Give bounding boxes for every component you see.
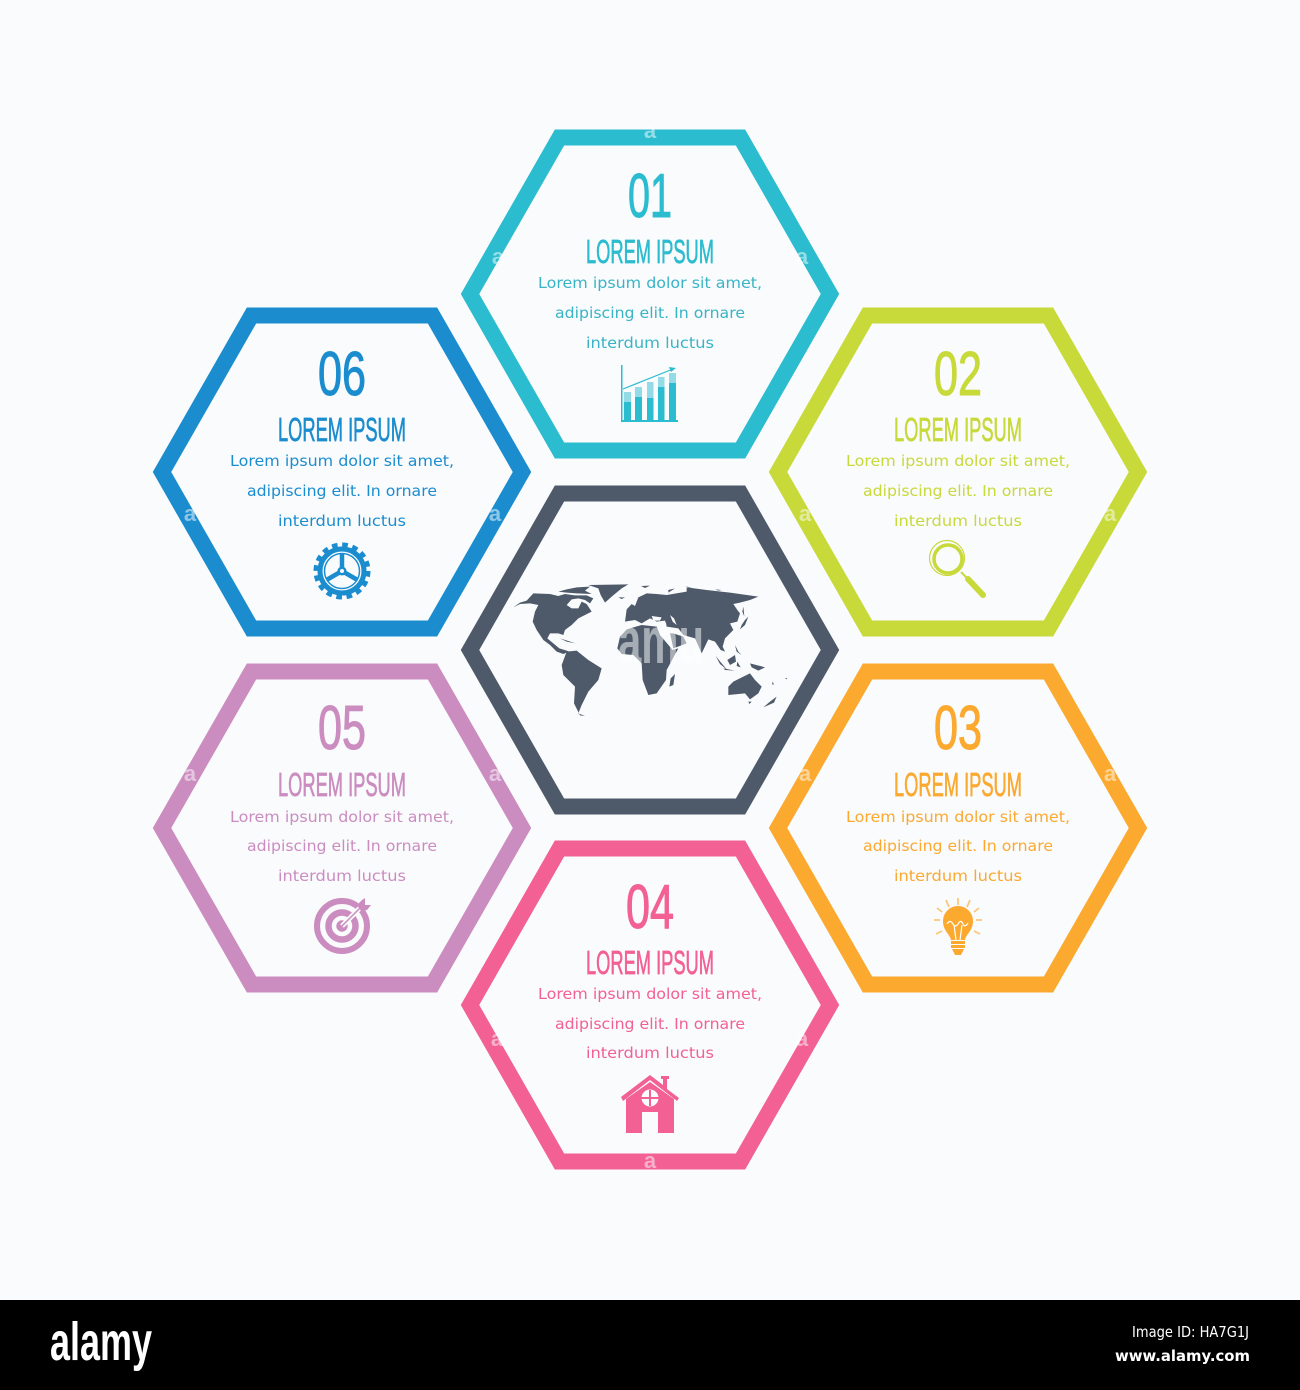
icon: light bulb bbox=[934, 898, 982, 955]
body text 04: interdum luctus bbox=[586, 1044, 714, 1062]
icon: gear bbox=[316, 545, 368, 597]
panel: 03 orange hexagon bbox=[778, 672, 1138, 984]
panel: 02 green hexagon bbox=[778, 316, 1138, 628]
world map bbox=[513, 584, 787, 716]
watermark marks: a bbox=[799, 501, 812, 526]
icon: magnifying glass bbox=[930, 540, 983, 595]
body text 02: adipiscing elit. In ornare bbox=[863, 482, 1053, 500]
heading 03: LOREM IPSUM bbox=[894, 766, 1022, 803]
body text 02 bbox=[846, 452, 1070, 530]
body text 01 bbox=[538, 274, 762, 352]
watermark marks: amu bbox=[618, 603, 704, 677]
panel: 04 pink hexagon bbox=[470, 848, 830, 1162]
footer logo: alamy bbox=[50, 1312, 152, 1372]
icon: bar chart bbox=[621, 365, 678, 422]
watermark marks: a bbox=[184, 501, 197, 526]
body text 03: Lorem ipsum dolor sit amet, bbox=[846, 808, 1070, 826]
number 05: 05 bbox=[318, 694, 366, 763]
watermark marks: a bbox=[491, 1026, 504, 1051]
number 01: 01 bbox=[628, 162, 672, 231]
body text 03 bbox=[846, 808, 1070, 885]
watermark marks: a bbox=[796, 244, 809, 269]
watermark marks: a bbox=[184, 761, 197, 786]
watermark marks: a bbox=[1104, 761, 1117, 786]
body text 03: adipiscing elit. In ornare bbox=[863, 837, 1053, 855]
heading 04: LOREM IPSUM bbox=[586, 944, 714, 981]
body text 04: adipiscing elit. In ornare bbox=[555, 1015, 745, 1033]
watermark marks: a bbox=[644, 118, 657, 143]
number 02: 02 bbox=[934, 340, 982, 409]
heading 06: LOREM IPSUM bbox=[278, 411, 406, 448]
body text 04 bbox=[538, 985, 762, 1062]
number 04: 04 bbox=[626, 873, 674, 942]
body text 06: adipiscing elit. In ornare bbox=[247, 482, 437, 500]
watermark marks: a bbox=[644, 1148, 657, 1173]
watermark marks: a bbox=[489, 501, 502, 526]
panel: 06 blue hexagon bbox=[162, 316, 522, 628]
heading 02: LOREM IPSUM bbox=[894, 411, 1022, 448]
body text 06: Lorem ipsum dolor sit amet, bbox=[230, 452, 454, 470]
watermark marks: a bbox=[796, 1026, 809, 1051]
number 06: 06 bbox=[318, 340, 366, 409]
website: www.alamy.com bbox=[1115, 1347, 1250, 1365]
heading 01: LOREM IPSUM bbox=[586, 233, 714, 270]
heading 05: LOREM IPSUM bbox=[278, 766, 406, 803]
body text 05: adipiscing elit. In ornare bbox=[247, 837, 437, 855]
watermark marks: a bbox=[489, 761, 502, 786]
body text 02: interdum luctus bbox=[894, 512, 1022, 530]
body text 05: Lorem ipsum dolor sit amet, bbox=[230, 808, 454, 826]
watermark marks bbox=[184, 118, 1117, 1173]
body text 06 bbox=[230, 452, 454, 530]
body text 04: Lorem ipsum dolor sit amet, bbox=[538, 985, 762, 1003]
body text 05: interdum luctus bbox=[278, 867, 406, 885]
icon: house bbox=[621, 1075, 679, 1133]
body text 02: Lorem ipsum dolor sit amet, bbox=[846, 452, 1070, 470]
body text 03: interdum luctus bbox=[894, 867, 1022, 885]
footer bar bbox=[0, 1300, 1300, 1390]
panel: centre hexagon with world map bbox=[470, 494, 830, 806]
watermark marks: a bbox=[1104, 501, 1117, 526]
image id: Image ID: HA7G1J bbox=[1132, 1323, 1249, 1341]
body text 01: interdum luctus bbox=[586, 334, 714, 352]
icon: target with arrow bbox=[317, 898, 371, 951]
body text 01: Lorem ipsum dolor sit amet, bbox=[538, 274, 762, 292]
body text 05 bbox=[230, 808, 454, 885]
watermark marks: a bbox=[799, 761, 812, 786]
panel: 05 mauve hexagon bbox=[162, 672, 522, 984]
body text 06: interdum luctus bbox=[278, 512, 406, 530]
number 03: 03 bbox=[934, 694, 982, 763]
watermark marks: a bbox=[492, 244, 505, 269]
body text 01: adipiscing elit. In ornare bbox=[555, 304, 745, 322]
panel: 01 teal hexagon bbox=[470, 138, 830, 450]
